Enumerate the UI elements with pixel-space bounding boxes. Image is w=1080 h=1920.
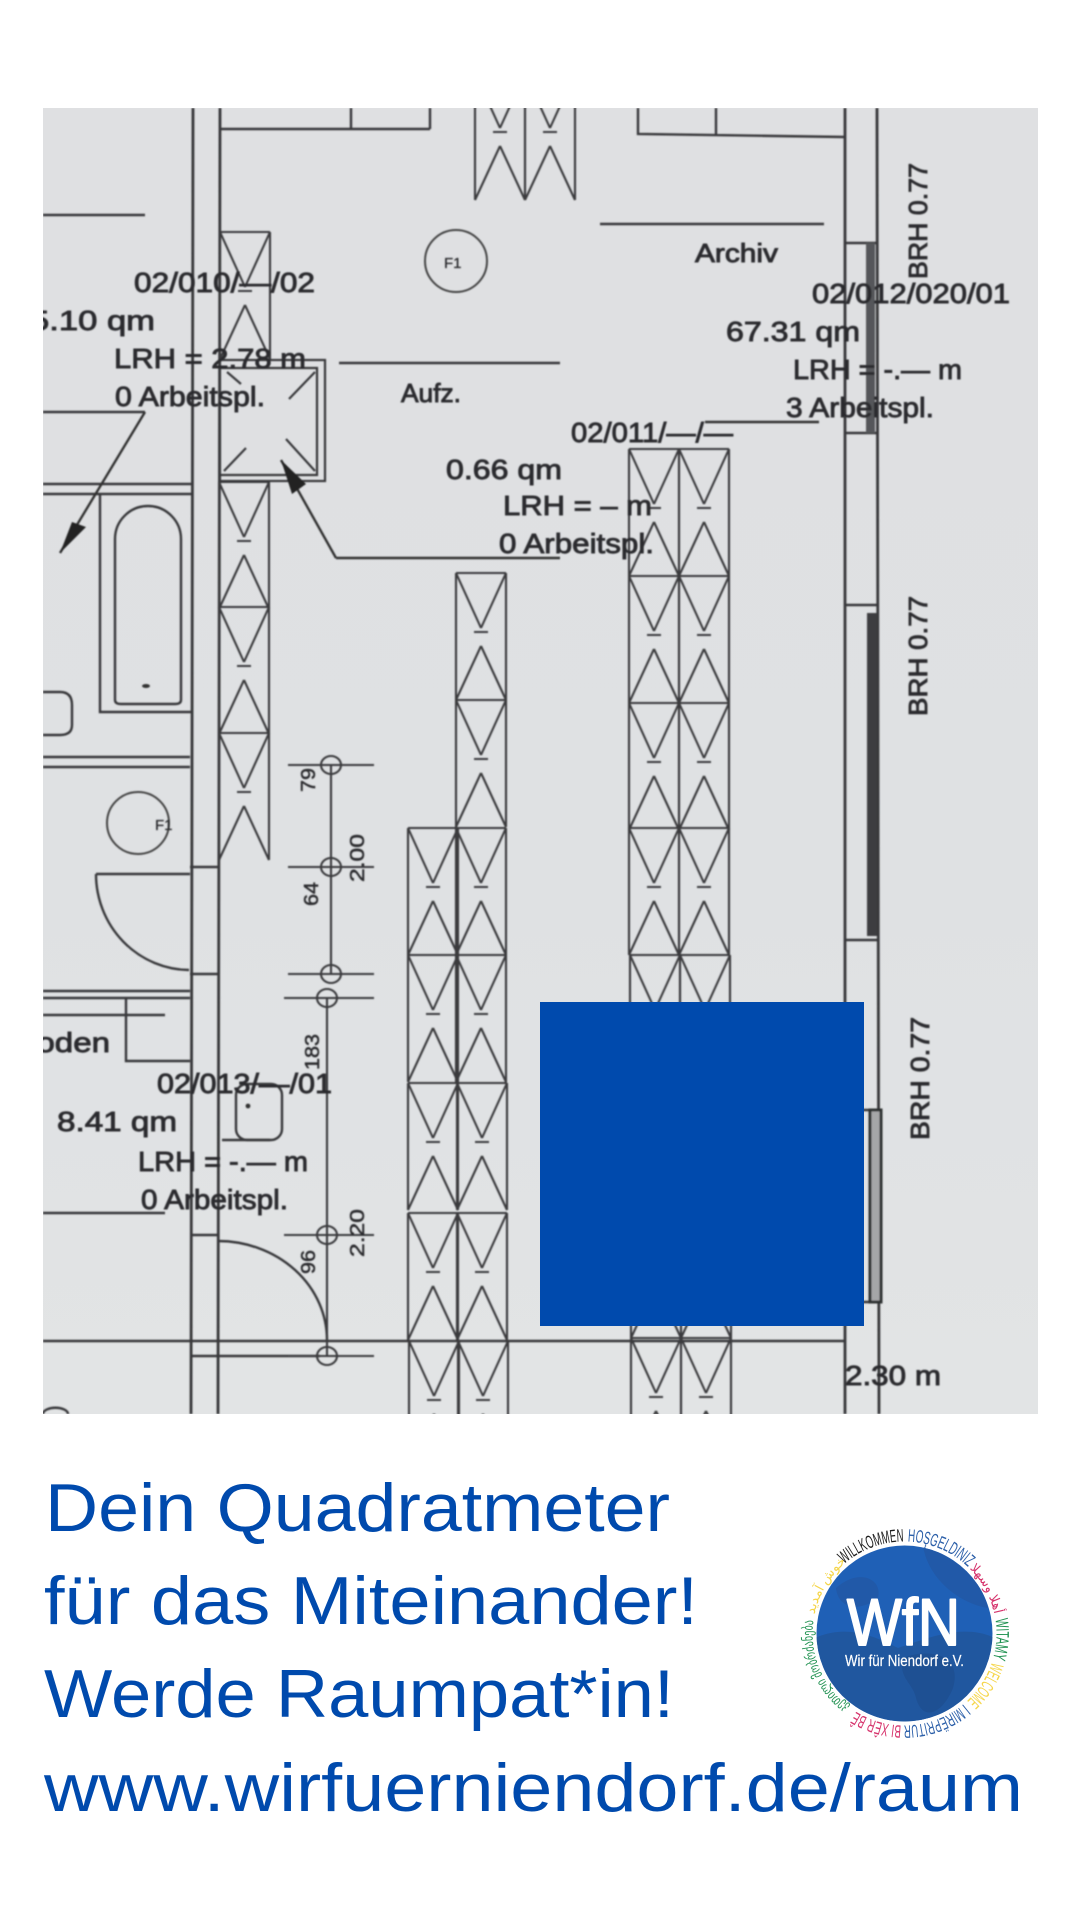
shelf column A	[219, 232, 270, 860]
welcome ring	[800, 1529, 1009, 1738]
plan text labels: 2.20	[347, 1209, 369, 1257]
plan text labels: Archiv	[695, 238, 778, 268]
call to action text: Werde Raumpat*in!	[44, 1656, 674, 1732]
plan text labels: LRH = -.— m	[793, 354, 962, 385]
plan text labels: 183	[302, 1034, 324, 1070]
welcome ring: WITAMY	[994, 1618, 1009, 1662]
plan text labels: BRH 0.77	[903, 596, 933, 716]
call to action text	[43, 1470, 1023, 1826]
welcome ring: BI XÊR BÊ	[850, 1712, 901, 1738]
plan text labels: 67.31 qm	[726, 316, 860, 347]
call to action text: www.wirfuerniendorf.de/raum	[43, 1750, 1023, 1826]
call to action text: Dein Quadratmeter	[45, 1470, 670, 1546]
arrows	[60, 412, 819, 558]
plan text labels: 3 Arbeitspl.	[786, 392, 934, 423]
dimension chain	[284, 756, 374, 1365]
plan text labels: 79	[298, 768, 320, 792]
plan text labels: F1	[155, 817, 173, 834]
logo: Wir für Niendorf e.V.	[800, 1529, 1009, 1738]
panel: floor plan	[18, 73, 1038, 1468]
blue square: one square metre	[540, 1002, 864, 1326]
plan text labels: boden	[18, 1027, 110, 1058]
call to action text: für das Miteinander!	[44, 1563, 698, 1639]
welcome ring: خوش آمدید	[810, 1560, 844, 1614]
plan text labels: BRH 0.77	[903, 163, 933, 279]
plan text labels: 0 Arbeitspl.	[115, 381, 265, 412]
walls and room lines	[43, 108, 879, 1414]
plan text labels: 02/012/020/01	[812, 278, 1010, 309]
plan text labels: 02/013/—/01	[157, 1068, 332, 1099]
plan text labels: 96	[298, 1250, 320, 1274]
plan text labels: LRH = 2.78 m	[114, 343, 306, 374]
floor plan drawing	[18, 73, 1010, 1468]
plan text labels: Aufz.	[401, 378, 461, 408]
elevator shaft	[220, 360, 325, 481]
plan text labels: 2.30 m	[845, 1360, 941, 1391]
plan text labels: LRH = -.— m	[138, 1146, 308, 1177]
plan text labels: 8.41 qm	[57, 1106, 177, 1137]
plan background	[43, 108, 1038, 1414]
plan text labels: 0.66 qm	[446, 454, 562, 485]
plan text labels: LRH = – m	[503, 490, 652, 521]
welcome ring: I MIRËPRITUR	[904, 1704, 971, 1738]
windows	[866, 243, 881, 1302]
globe	[815, 1544, 995, 1724]
plan text labels: 0 Arbeitspl.	[141, 1184, 288, 1215]
top shelf unit	[473, 108, 577, 202]
bath dot and sink dot	[142, 684, 250, 1108]
plan text labels: BRH 0.77	[905, 1017, 935, 1140]
shelf column B	[408, 573, 508, 1468]
plan text labels: 2.00	[347, 834, 369, 882]
welcome ring: WILLKOMMEN	[836, 1529, 903, 1563]
logo name: Wir für Niendorf e.V.	[845, 1653, 964, 1670]
shelf column C	[629, 449, 731, 1465]
plan text labels: 64	[301, 882, 323, 906]
welcome ring: HOŞGELDINIZ	[908, 1529, 976, 1567]
welcome ring: WELCOME	[967, 1664, 1004, 1710]
plan text labels: 02/011/—/—	[571, 417, 733, 448]
plan text labels: 5.10 qm	[30, 305, 155, 336]
welcome ring: კეთილი მობრძანება	[800, 1620, 850, 1712]
welcome ring: أهلا وسهلا	[970, 1562, 1007, 1613]
fixture circles	[107, 230, 487, 854]
plan text labels	[18, 163, 1010, 1391]
plan text labels: 0 Arbeitspl.	[499, 528, 654, 559]
plan text labels: 02/010/—/02	[134, 267, 315, 298]
logo initials: WfN	[847, 1585, 960, 1659]
plan text labels: F1	[444, 255, 462, 272]
